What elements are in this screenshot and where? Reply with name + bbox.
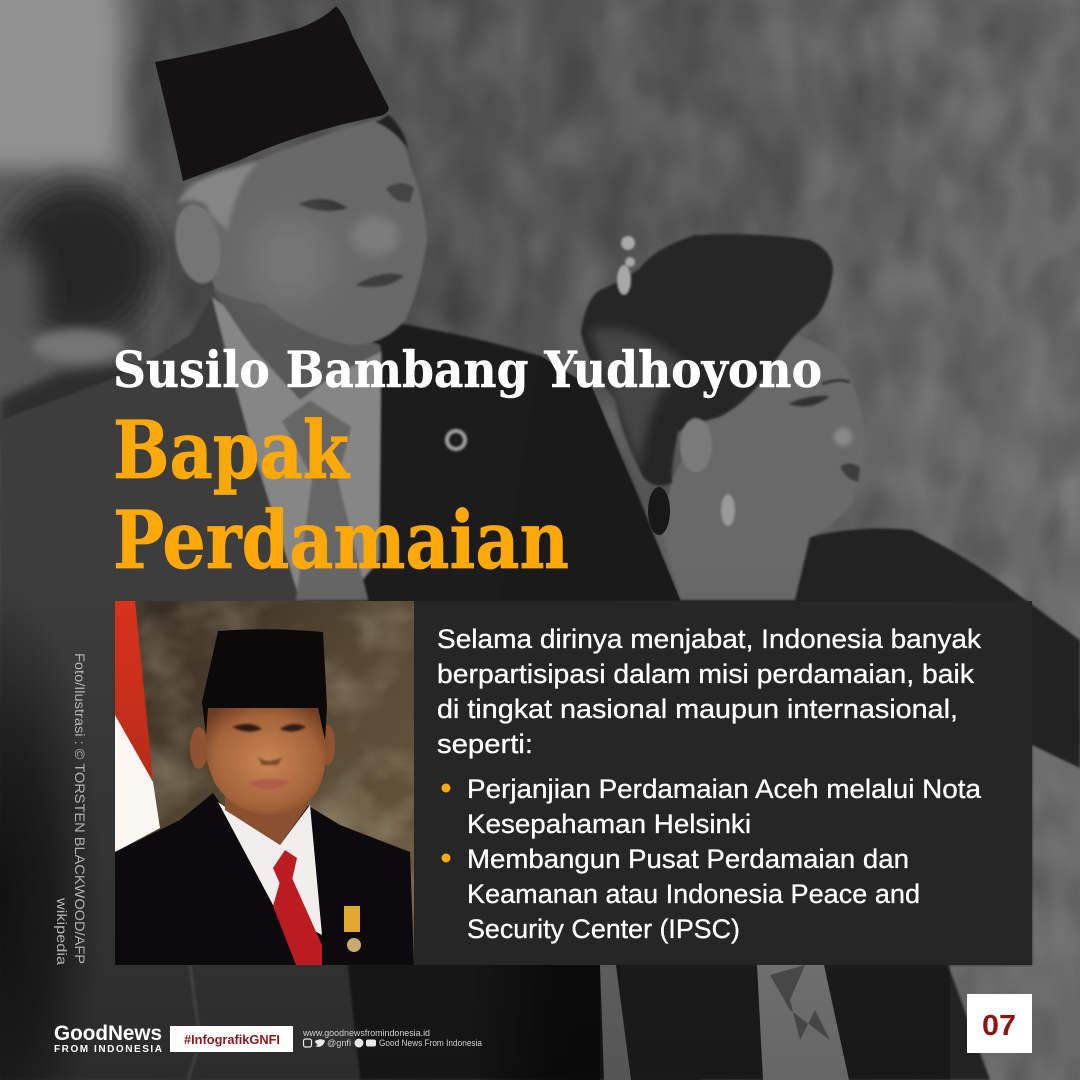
- photo credit: [54, 653, 87, 966]
- jacket fold: [188, 965, 200, 1080]
- shirt: [218, 802, 322, 935]
- portrait photo: [115, 601, 414, 965]
- bullet 1: Perjanjian Perdamaian Aceh melalui Nota: [467, 774, 982, 804]
- bottom garment strips: [470, 965, 849, 1080]
- bullet 1: Kesepahaman Helsinki: [467, 809, 751, 839]
- neck: [213, 290, 381, 400]
- title: Bapak: Bapak: [113, 403, 350, 497]
- tie: [282, 400, 368, 600]
- hashtag badge: #InfografikGNFI: [184, 1032, 280, 1047]
- dark right suit: [190, 322, 700, 1080]
- description text: di tingkat nasional maupun internasional,: [437, 694, 958, 724]
- description text: Selama dirinya menjabat, Indonesia banyak: [437, 624, 982, 654]
- social icons: [304, 1038, 376, 1048]
- panel: description: [115, 601, 1032, 965]
- lower shading: [0, 560, 950, 1080]
- footer logo: [54, 1022, 162, 1055]
- lapel pin: [447, 431, 465, 449]
- medal: [344, 906, 361, 952]
- hashtag badge: [170, 1026, 293, 1052]
- footer contacts: www.goodnewsfromindonesia.id: [302, 1028, 430, 1038]
- description text: seperti:: [437, 729, 533, 759]
- woman: face and neck: [660, 333, 864, 600]
- blurred background person: [0, 180, 154, 440]
- shirt: [212, 297, 381, 600]
- photo credit: Foto/Ilustrasi : © TORSTEN BLACKWOOD/AFP: [72, 653, 87, 964]
- photo credit: wikipedia: [54, 897, 69, 966]
- woman: hair: [581, 234, 833, 485]
- footer contacts: @gnfi: [327, 1038, 351, 1048]
- hat: [202, 629, 327, 740]
- woman: dress: [620, 529, 1080, 1080]
- footer logo: FROM INDONESIA: [54, 1044, 162, 1055]
- woman: hair highlight: [590, 328, 690, 470]
- title: name: Susilo Bambang Yudhoyono: [113, 340, 822, 399]
- page number: 07: [982, 1010, 1016, 1042]
- tie: [273, 850, 322, 965]
- flag: [115, 601, 160, 852]
- bullet 1: [442, 774, 982, 839]
- woman: cloak shadow: [500, 356, 680, 600]
- man: suit and figure: [0, 290, 700, 1080]
- bullet 2: Membangun Pusat Perdamaian dan: [467, 844, 909, 874]
- man: black peci hat: [155, 6, 389, 181]
- footer contacts: [302, 1028, 482, 1048]
- face: [205, 708, 327, 815]
- suit: [115, 793, 414, 965]
- footer contacts: Good News From Indonesia: [379, 1038, 482, 1048]
- bullet 2: [442, 844, 920, 944]
- blurred light pillar at top left: [0, 0, 125, 175]
- title: Perdamaian: Perdamaian: [113, 493, 569, 587]
- woman: hair ornament: [617, 236, 635, 295]
- man: head: [169, 115, 427, 345]
- ears: [190, 725, 335, 769]
- description text: berpartisipasi dalam misi perdamaian, baik: [437, 659, 975, 689]
- footer logo: GoodNews: [54, 1022, 162, 1045]
- bullet 2: Security Center (IPSC): [467, 914, 740, 944]
- page number: [967, 994, 1032, 1053]
- description text: [437, 624, 982, 759]
- neck: [225, 790, 308, 845]
- bullet 2: Keamanan atau Indonesia Peace and: [467, 879, 920, 909]
- eyes, nose shade and mouth: [232, 724, 306, 789]
- left-edge shading: [0, 560, 170, 1080]
- woman: ear and earring: [648, 418, 735, 535]
- left jacket: [0, 295, 360, 1080]
